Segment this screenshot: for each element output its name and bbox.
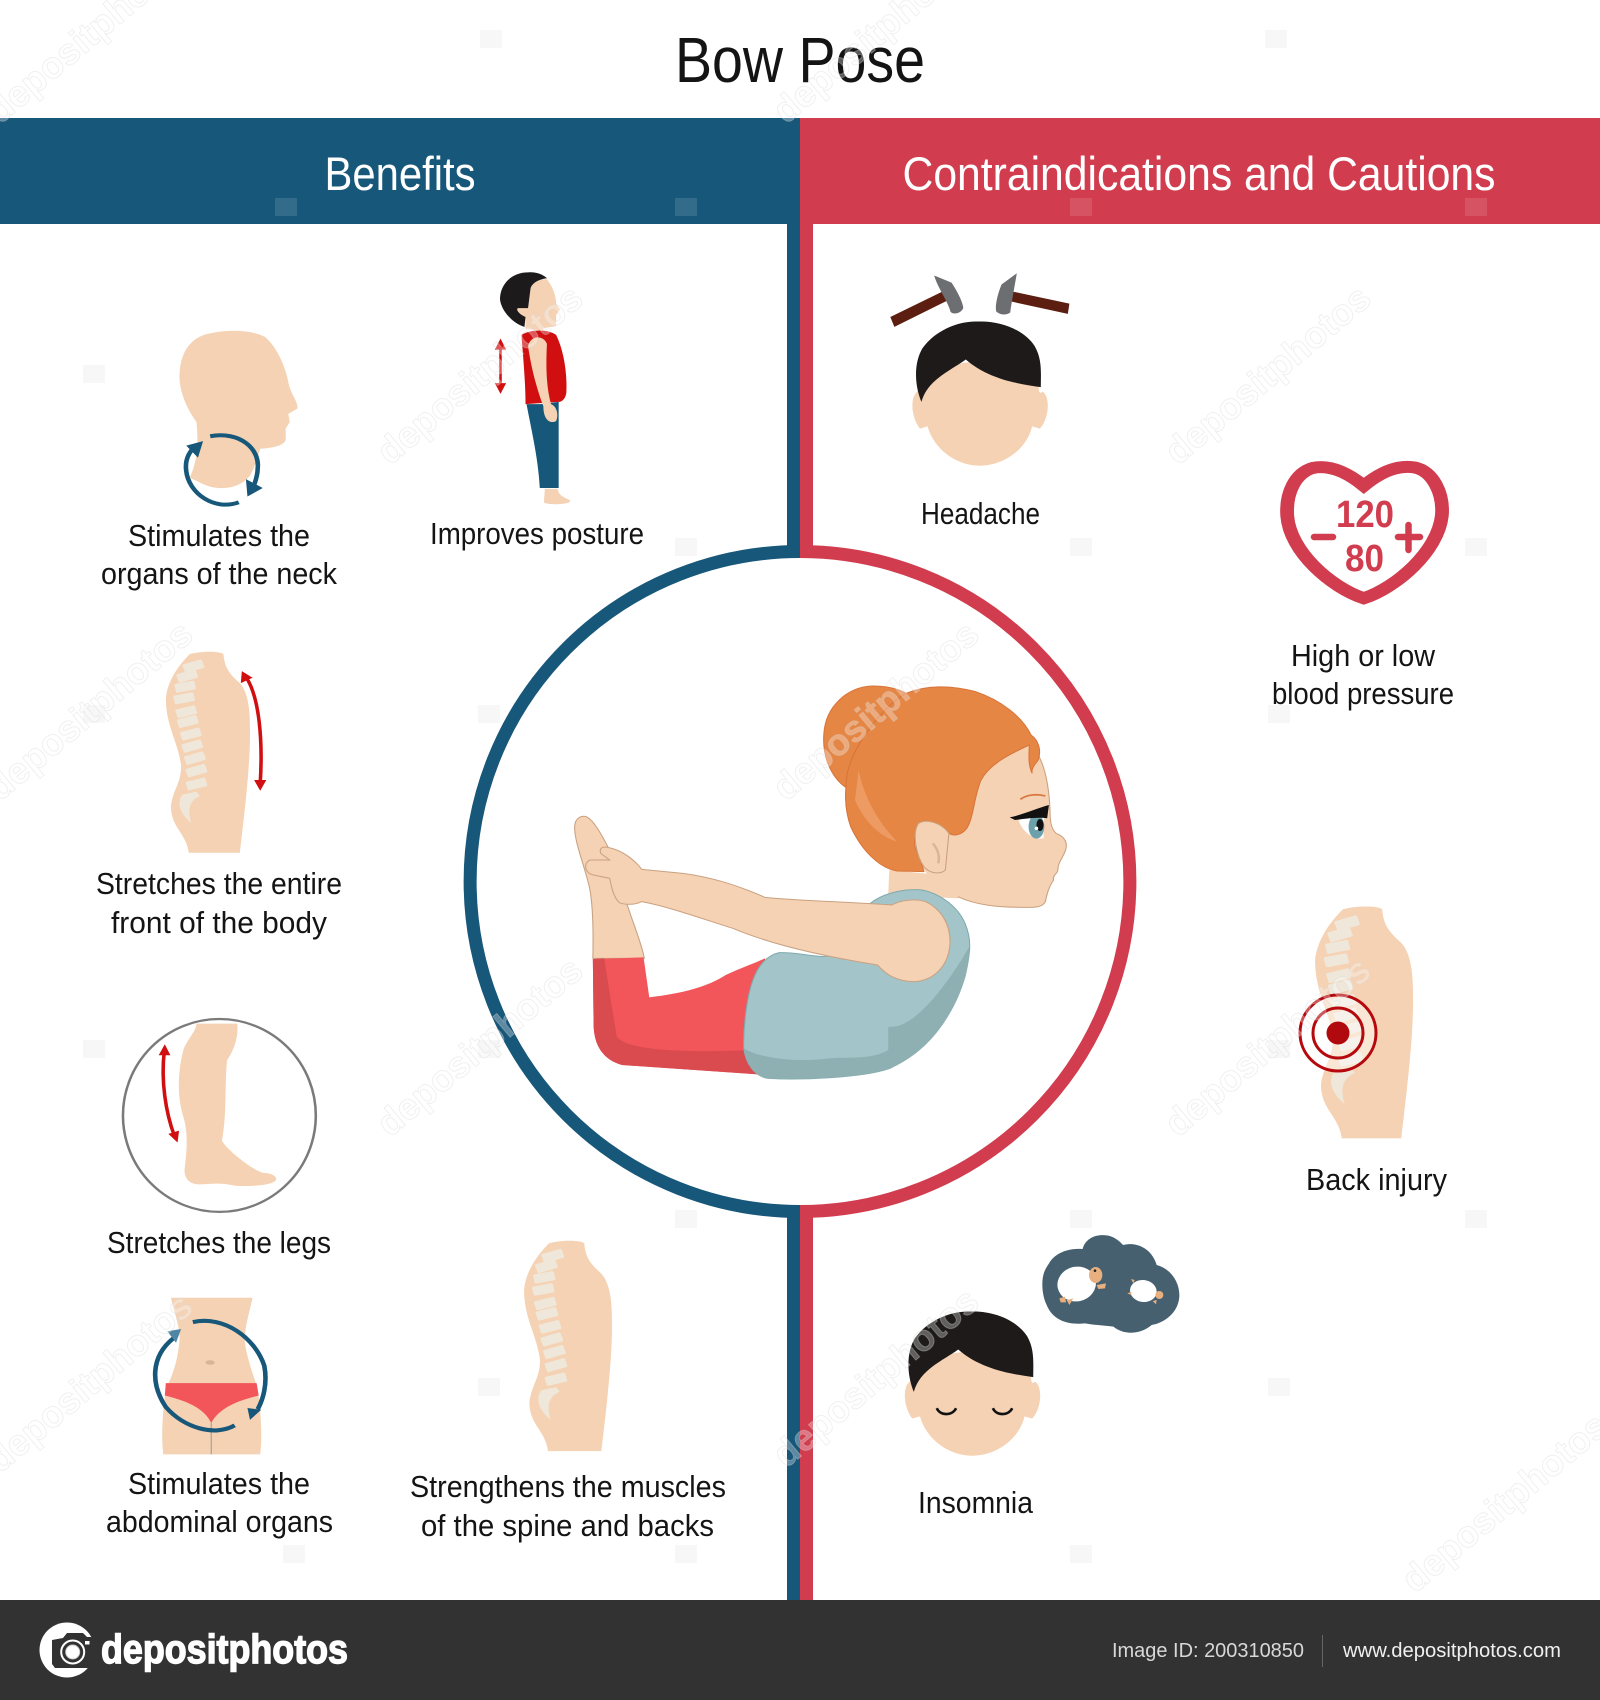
caption: front of the body — [111, 905, 327, 940]
icon: torso with pain target — [1300, 907, 1413, 1138]
eye — [1010, 805, 1049, 839]
footer bar — [0, 1600, 1600, 1700]
panel header: contraindications and cautions: Contraindications and Cautions — [902, 147, 1496, 200]
illustration: girl in bow pose — [575, 686, 1066, 1079]
image id: Image ID: 200310850 — [1112, 1640, 1304, 1662]
central divider and ring — [470, 224, 1130, 1600]
text: depositphotos — [1157, 277, 1378, 472]
hair — [846, 687, 1040, 872]
caption: blood pressure — [1272, 676, 1454, 711]
icon: head and neck with rotation arrows — [179, 331, 298, 505]
icon: sleeping head — [905, 1311, 1040, 1456]
item: stretches the legs — [107, 1019, 331, 1260]
text: depositphotos — [1157, 949, 1378, 1144]
top shading — [744, 947, 969, 1079]
item: high or low blood pressure — [1272, 467, 1454, 711]
caption: Strengthens the muscles — [410, 1469, 726, 1504]
item: stimulates the organs of the neck — [101, 331, 337, 591]
shorts — [593, 957, 769, 1075]
eyebrow — [1020, 795, 1045, 799]
top — [744, 890, 970, 1079]
icon: torso with spine and arrow — [166, 652, 266, 853]
caption: Stretches the entire — [96, 866, 342, 901]
caption: Headache — [921, 496, 1040, 531]
sheep small — [1127, 1278, 1163, 1304]
icon: heart with pressure values — [1287, 467, 1442, 598]
leg and foot — [575, 816, 644, 958]
hair highlight — [855, 770, 897, 842]
title: Bow Pose — [675, 24, 925, 96]
caption: organs of the neck — [101, 556, 337, 591]
caption: Back injury — [1306, 1162, 1447, 1197]
sheep large — [1054, 1263, 1106, 1305]
icon: torso with spine — [524, 1241, 612, 1451]
hair bun — [824, 686, 933, 788]
item: improves posture — [430, 272, 644, 551]
caption: High or low — [1291, 638, 1436, 673]
caption: Stretches the legs — [107, 1225, 331, 1260]
icon: standing man with arrow — [495, 272, 570, 504]
item: back injury — [1300, 907, 1447, 1197]
panel header: benefits: Benefits — [324, 147, 476, 200]
caption: of the spine and backs — [421, 1508, 714, 1543]
website: www.depositphotos.com — [1342, 1640, 1561, 1662]
icon: abdomen with rotation arrows — [155, 1298, 265, 1454]
icon: thought cloud with sheep — [1042, 1235, 1179, 1333]
icon: heart with pressure values: 120 — [1336, 494, 1394, 536]
neck — [888, 870, 959, 898]
item: headache — [890, 273, 1069, 531]
item: stimulates the abdominal organs — [106, 1298, 333, 1539]
text: depositphotos — [369, 949, 590, 1144]
icon: heart with pressure values: 80 — [1345, 538, 1384, 580]
icon: head with hammers — [890, 273, 1069, 466]
caption: Insomnia — [918, 1485, 1034, 1520]
caption: Stimulates the — [128, 518, 310, 553]
caption: abdominal organs — [106, 1504, 333, 1539]
logo — [40, 1622, 348, 1678]
face — [918, 744, 1066, 907]
caption: Stimulates the — [128, 1466, 310, 1501]
text: depositphotos — [765, 613, 986, 808]
text: depositphotos — [369, 277, 590, 472]
panel header: benefits — [0, 118, 800, 224]
item: stretches the entire front of the body — [96, 652, 342, 940]
panel header: contraindications and cautions — [800, 118, 1600, 224]
icon: leg in circle with arrow — [123, 1019, 316, 1212]
ear — [915, 821, 949, 873]
inner ear — [933, 843, 939, 863]
shorts shading — [593, 958, 758, 1074]
text: depositphotos — [765, 1280, 986, 1475]
item: strengthens the muscles of the spine and backs — [410, 1241, 726, 1543]
item: insomnia — [905, 1235, 1179, 1520]
caption: Improves posture — [430, 516, 644, 551]
logo: depositphotos — [101, 1626, 348, 1672]
arm and hand — [586, 847, 950, 982]
